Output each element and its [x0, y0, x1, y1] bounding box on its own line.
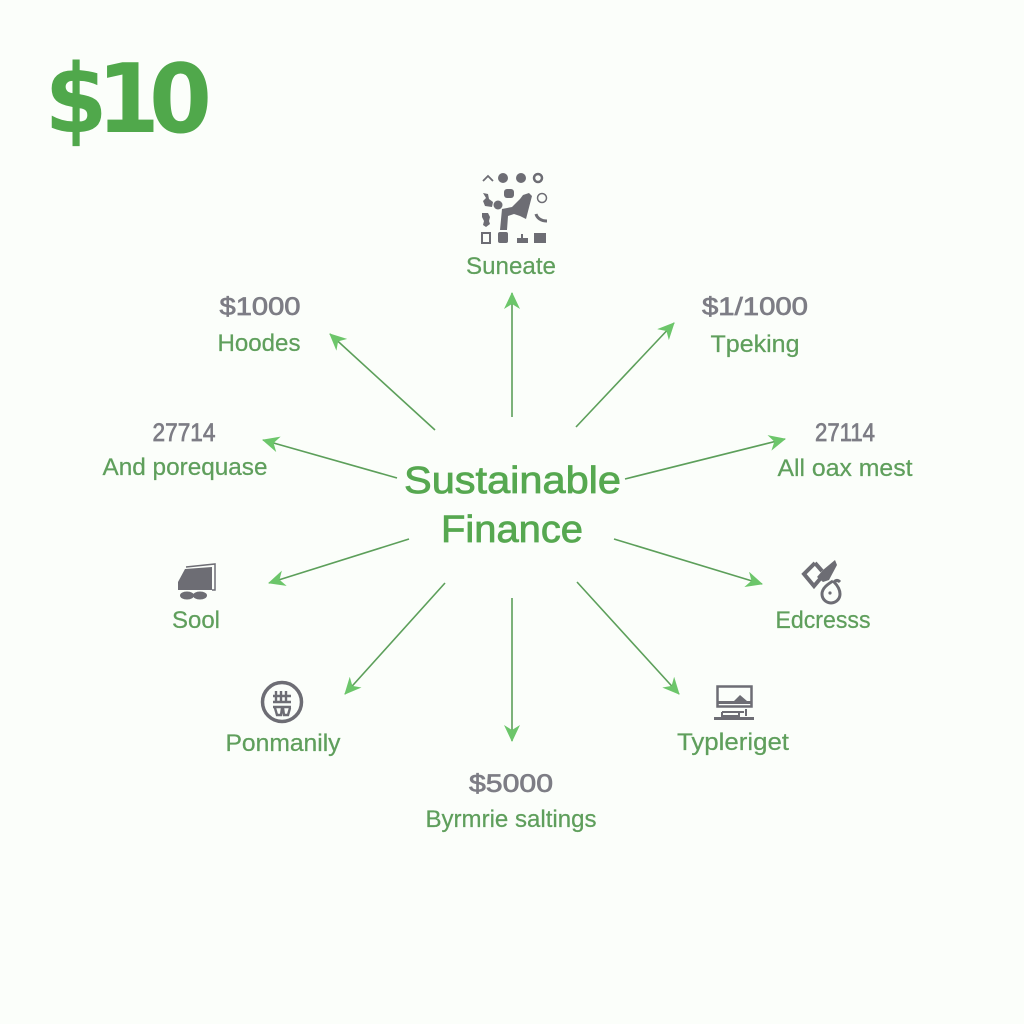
node: Sool (lower left) [172, 564, 220, 634]
value: $1/1000 [702, 293, 808, 321]
label: Tpeking [710, 331, 800, 358]
label: Byrmrie saltings [426, 806, 596, 833]
central title: Sustainable Finance: Finance [441, 509, 583, 551]
node: 27714 And porequase (left) [102, 419, 268, 481]
node: 27114 All oax mest (right) [778, 419, 913, 482]
node: $5000 Byrmrie saltings (bottom) [426, 770, 596, 833]
value: 27114 [815, 419, 875, 447]
label: Suneate [466, 253, 556, 280]
label: Ponmanily [226, 730, 340, 757]
icon: circled glyph [262, 682, 302, 722]
node: Ponmanily (bottom left) [226, 682, 340, 757]
label: Typleriget [677, 729, 789, 756]
label: Hoodes [218, 330, 300, 357]
icon: grid of finance glyphs [482, 173, 547, 243]
central title: Sustainable Finance: Sustainable [404, 460, 621, 502]
value: $5000 [469, 770, 553, 798]
label: Sool [172, 607, 220, 634]
label: Edcresss [776, 607, 870, 634]
node: $1/1000 Tpeking (upper right) [702, 293, 808, 358]
arrows radiating from centre [263, 293, 785, 741]
node: Typleriget (bottom right) [677, 686, 789, 756]
central title: Sustainable Finance [404, 460, 621, 551]
icon: monitor stack [178, 564, 215, 600]
node: Edcresss (lower right) [776, 560, 870, 634]
big value: $10: $10 [45, 44, 212, 155]
icon: desktop computer [714, 686, 754, 720]
node: $1000 Hoodes (upper left) [218, 293, 300, 357]
icon: plane and drop [804, 560, 840, 603]
label: All oax mest [778, 455, 913, 482]
value: $1000 [220, 293, 300, 321]
label: And porequase [102, 454, 268, 481]
node: Suneate (top) [466, 173, 556, 280]
value: 27714 [152, 419, 216, 447]
